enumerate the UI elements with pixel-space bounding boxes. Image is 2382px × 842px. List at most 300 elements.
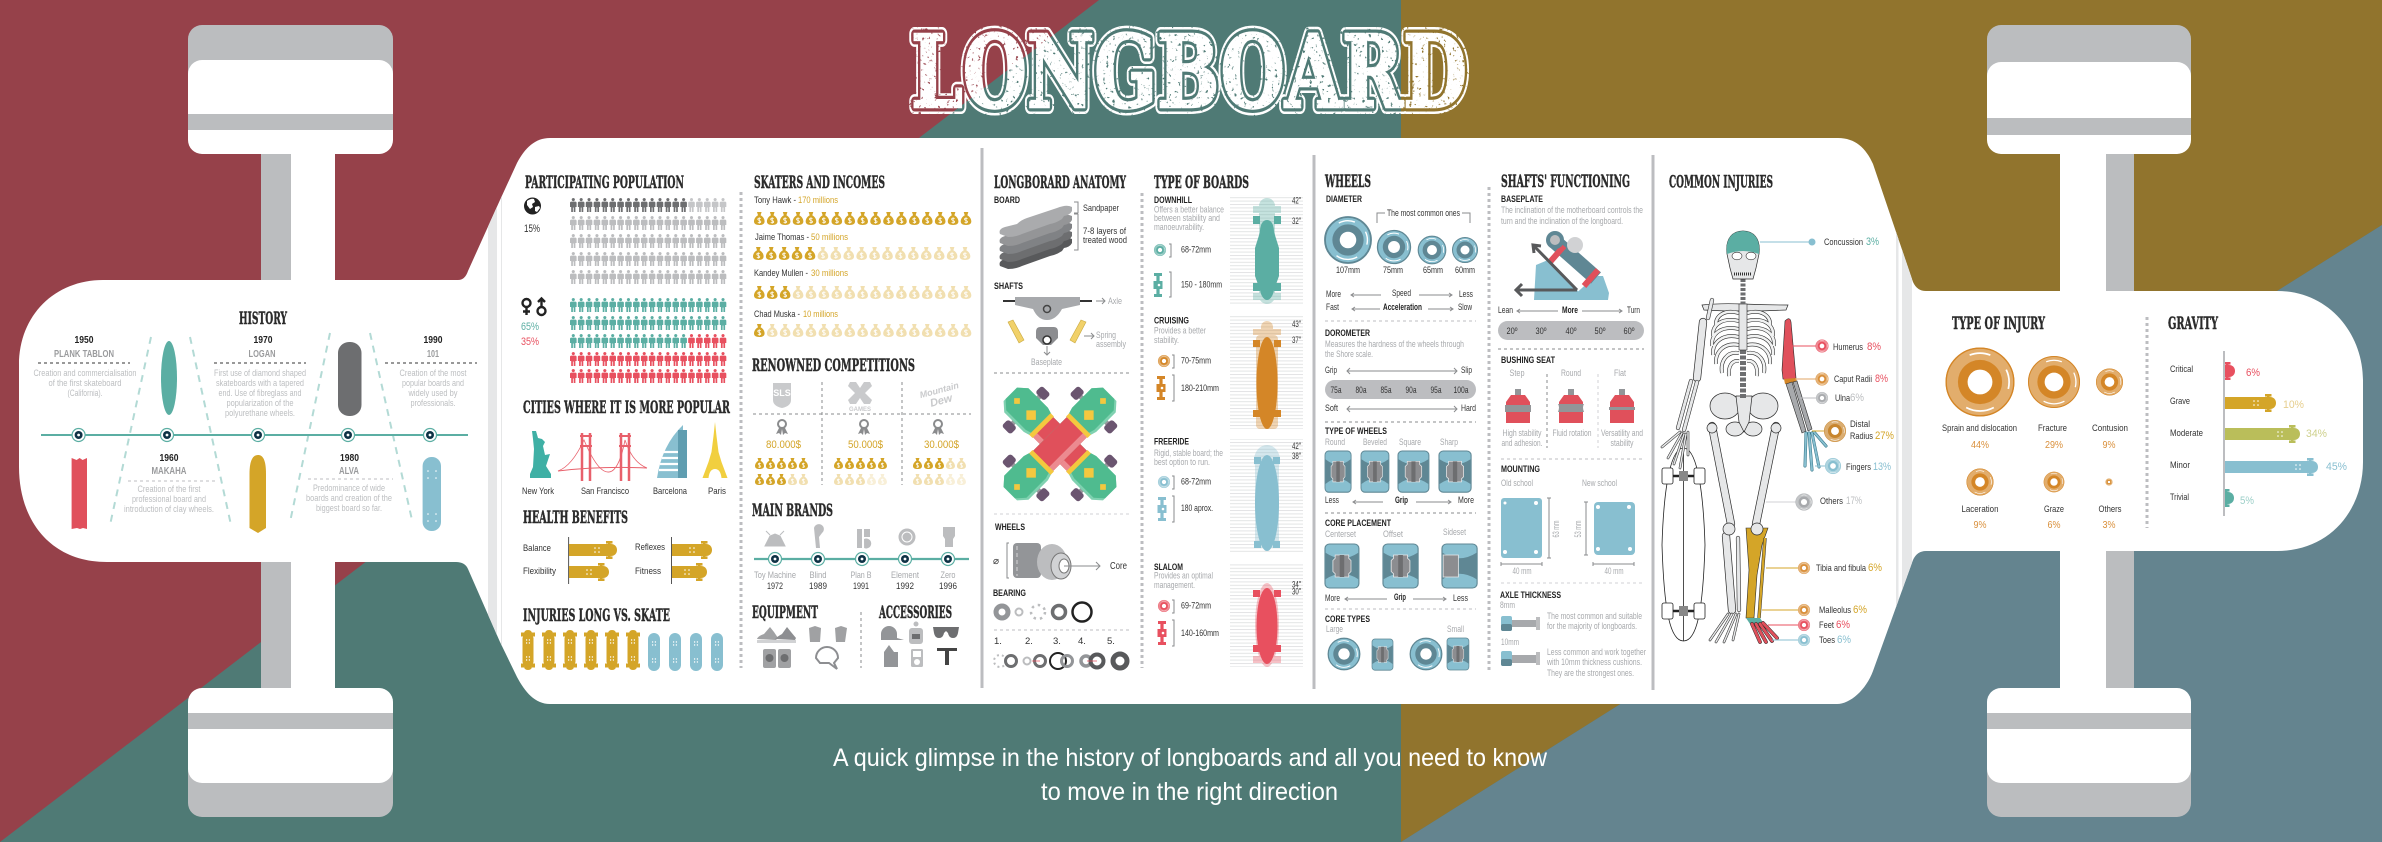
labels: truck parts	[1031, 296, 1126, 368]
injury labels: Sprain and dislocation	[1942, 423, 2017, 434]
stat: male female share: 65%	[521, 321, 539, 333]
injury labels	[1942, 423, 2128, 531]
mounting block: 53 mm	[1573, 520, 1584, 538]
row: kandey mullen	[754, 268, 971, 299]
entry: 1990 101: Creation of the most	[400, 368, 467, 379]
board type: slalom: 30"	[1292, 587, 1301, 598]
illustration: crossed boards	[990, 374, 1130, 514]
scale: speed and acceleration	[1326, 288, 1473, 313]
callout: fingers: 13%	[1873, 461, 1891, 473]
callout: caput radii: 8%	[1875, 373, 1888, 385]
panel: gravity	[2168, 314, 2347, 516]
subheading: bearing: BEARING	[993, 588, 1026, 599]
entry: 1960 makaha	[124, 452, 217, 515]
bearing step numbers: 2.	[1025, 636, 1033, 647]
subheading: core types: Large	[1326, 624, 1343, 635]
board type: freeride: Rigid, stable board; the	[1154, 448, 1223, 459]
callout: fingers: Fingers	[1846, 462, 1871, 473]
illustration: baseplate angle	[1516, 231, 1609, 300]
board type: freeride: best option to run.	[1154, 457, 1210, 468]
heading: renowned competitions: RENOWNED COMPETITIONS	[752, 356, 915, 376]
bearing step numbers	[994, 636, 1115, 647]
heading: skaters and incomes: SKATERS AND INCOMES	[754, 173, 885, 193]
entry: 1950 plank tablon: Creation and commercialisation	[34, 368, 136, 379]
row: tony hawk: Tony Hawk -	[754, 195, 796, 206]
scale: grip by core placement: More	[1325, 593, 1340, 604]
subheading: durometer: DOROMETER	[1325, 328, 1370, 339]
heading: accessories: ACCESSORIES	[878, 603, 952, 623]
panel: history timeline	[34, 309, 477, 533]
heading: shafts functioning: SHAFTS' FUNCTIONING	[1501, 172, 1630, 192]
heading: type of boards: TYPE OF BOARDS	[1154, 173, 1249, 193]
injury labels: Contusion	[2092, 423, 2128, 434]
callout: humerus: 8%	[1867, 341, 1881, 353]
board type: freeride: 42"	[1292, 441, 1301, 452]
labels	[523, 542, 665, 577]
mounting block: 63 mm	[1551, 520, 1562, 538]
callout: others	[1766, 494, 1862, 510]
icons: bushings	[1505, 389, 1635, 423]
stat: male female share	[521, 321, 539, 348]
labels: board layers: Sandpaper	[1083, 203, 1119, 214]
scale: hardness: Hard	[1461, 403, 1476, 414]
entry: 1960 makaha: MAKAHA	[152, 465, 187, 477]
brand icons	[765, 524, 955, 548]
bearing step numbers: 3.	[1053, 636, 1061, 647]
brand names: Blind	[810, 570, 826, 581]
board: makaha	[161, 341, 177, 415]
subheading: type of wheels	[1325, 426, 1471, 492]
subheading: core placement: Centerset	[1325, 529, 1356, 540]
entry: 1950 plank tablon: (California).	[68, 388, 102, 399]
entry: 1970 logan: LOGAN	[248, 348, 276, 360]
injury labels: Laceration	[1962, 504, 1998, 515]
board type: cruising: CRUISING	[1154, 316, 1189, 326]
callout: malleolus: Malleolus	[1819, 605, 1851, 616]
pictogram: population share	[570, 198, 726, 284]
labels: truck parts: assembly	[1096, 339, 1126, 350]
axle thickness block: The most common and suitable	[1547, 611, 1642, 622]
entry: 1980 alva	[306, 452, 393, 514]
board type: cruising: 43"	[1292, 319, 1301, 330]
row: tony hawk: 170 millions	[798, 195, 838, 206]
scale: hardness: 100a	[1454, 385, 1469, 396]
board: 101	[423, 457, 441, 531]
entry: 1990 101: professionals.	[410, 398, 456, 409]
callout: toes	[1772, 634, 1851, 646]
entry: 1980 alva: Predominance of wide	[313, 483, 385, 494]
board type: downhill: 42"	[1292, 196, 1301, 206]
bearing step numbers: 4.	[1078, 636, 1086, 647]
subheading: type of wheels: Round	[1325, 437, 1345, 448]
scale: grip by wheel type: More	[1458, 495, 1474, 506]
mounting block: New school	[1582, 478, 1617, 489]
board type: downhill	[1154, 195, 1303, 304]
row: jaime thomas	[753, 232, 970, 260]
callout: ulna: Ulna	[1835, 393, 1851, 404]
bearing step numbers: 5.	[1107, 636, 1115, 647]
row: minor	[2170, 458, 2347, 476]
city labels	[522, 486, 726, 497]
heading: equipment: EQUIPMENT	[752, 603, 818, 623]
tagline: A quick glimpse in the history of longboards and all you need to know	[833, 744, 1548, 772]
callout: malleolus	[1762, 604, 1867, 616]
callout: concussion: Concussion	[1824, 237, 1863, 248]
row: jaime thomas: Jaime Thomas -	[755, 232, 809, 243]
baseplate block: 40º	[1566, 326, 1577, 337]
scale: speed and acceleration: Acceleration	[1383, 302, 1422, 313]
heading: type of injury: TYPE OF INJURY	[1952, 314, 2045, 334]
panel: equipment	[752, 603, 847, 669]
bushing seat block: Round	[1561, 368, 1581, 379]
bushing seat block: Step	[1510, 368, 1524, 379]
diagram: wheel diameters: 107mm	[1336, 265, 1360, 276]
entry: 1950 plank tablon: PLANK TABLON	[54, 348, 114, 360]
accessory icons	[881, 622, 959, 667]
baseplate block: Turn	[1627, 305, 1640, 316]
bushing seat block	[1501, 355, 1643, 449]
board type: cruising: Provides a better	[1154, 326, 1206, 337]
bushing seat block: stability	[1610, 438, 1634, 449]
logo: X Games	[848, 382, 872, 413]
callout: distal radius: Radius	[1850, 431, 1873, 442]
board type: downhill: DOWNHILL	[1154, 195, 1192, 206]
board type: freeride: 180 aprox.	[1181, 503, 1213, 514]
callout: tibia and fibula: Tibia and fibula	[1816, 563, 1867, 574]
scale: grip by wheel type	[1325, 495, 1474, 506]
prize amounts: 30.000$	[924, 439, 959, 451]
heading: cities: CITIES WHERE IT IS MORE POPULAR	[523, 398, 730, 418]
panel: shafts functioning	[1498, 172, 1646, 679]
baseplate block	[1498, 194, 1644, 340]
scale: grip by core placement: Less	[1453, 593, 1468, 604]
entry: 1950 plank tablon: 1950	[74, 334, 94, 346]
subheading: shafts: SHAFTS	[994, 281, 1023, 292]
wheels: injury proportions	[1946, 348, 2123, 496]
baseplate block: 50º	[1594, 326, 1606, 337]
brand names	[754, 570, 956, 581]
row: minor: Minor	[2170, 460, 2190, 471]
scale: speed and acceleration: Less	[1459, 289, 1473, 300]
axle thickness block: 8mm	[1500, 600, 1515, 611]
subheading: diameter: DIAMETER	[1326, 194, 1362, 205]
subheading: core placement: Offset	[1383, 529, 1403, 540]
injury labels: Fracture	[2038, 423, 2067, 434]
callout: ulna	[1800, 392, 1864, 404]
callout: tibia and fibula: 6%	[1868, 562, 1882, 574]
bushing seat block: BUSHING SEAT	[1501, 355, 1555, 366]
callout: malleolus: 6%	[1853, 604, 1867, 616]
entry: 1950 plank tablon	[34, 334, 136, 399]
row: kandey mullen: 30 millions	[811, 268, 848, 279]
entry: 1960 makaha: 1960	[160, 452, 179, 464]
labels: Flexibility	[523, 566, 556, 577]
illustration: wheel detail	[993, 543, 1127, 580]
equipment icons	[757, 626, 847, 669]
panel: type of injury	[1942, 314, 2128, 531]
right trucks and wheels	[1987, 25, 2191, 817]
brand years: 1992	[896, 581, 914, 592]
axle thickness block: with 10mm thickness cushions.	[1546, 657, 1642, 668]
scale: hardness: Soft	[1325, 403, 1338, 414]
callout: tibia and fibula	[1766, 562, 1882, 574]
title: LONGBOARD	[911, 13, 1467, 131]
prize amounts: 80.000$	[766, 439, 801, 451]
board type: slalom	[1154, 562, 1303, 667]
callout: ulna: 6%	[1850, 392, 1864, 404]
left trucks and wheels	[188, 25, 393, 817]
scale: hardness	[1325, 365, 1476, 414]
brand names: Zero	[940, 570, 956, 581]
board type: downhill: 68-72mm	[1181, 244, 1211, 256]
subheading: core placement: CORE PLACEMENT	[1325, 518, 1391, 529]
callout: concussion	[1760, 236, 1879, 248]
injury labels: 44%	[1971, 439, 1989, 451]
callout: feet	[1768, 619, 1850, 631]
scale: grip by wheel type: Less	[1325, 495, 1339, 506]
bushing seat block: High stability	[1502, 428, 1542, 439]
bushing seat block: and adhesion.	[1502, 438, 1542, 449]
subheading: type of wheels: Square	[1399, 437, 1421, 448]
illustration: truck parts	[1003, 297, 1105, 355]
injury labels: 6%	[2048, 519, 2060, 531]
heading: injuries long vs skate: INJURIES LONG VS. SKATE	[523, 606, 670, 626]
panel: common injuries	[1662, 172, 1894, 646]
subheading: board: BOARD	[994, 195, 1020, 206]
heading: main brands: MAIN BRANDS	[752, 501, 833, 521]
scale: grip by core placement: Grip	[1394, 592, 1406, 603]
tagline: to move in the right direction	[1041, 778, 1338, 806]
entry: 1960 makaha: professional board and	[132, 494, 206, 505]
city labels: New York	[522, 486, 554, 497]
entry: 1950 plank tablon: of the first skateboard	[48, 378, 122, 389]
icon: golden gate bridge	[558, 433, 647, 481]
heading: history: HISTORY	[239, 309, 287, 329]
scale: hardness: 80a	[1356, 385, 1367, 396]
board type: freeride: FREERIDE	[1154, 437, 1189, 448]
illustration: wheel detail: ⌀	[993, 556, 999, 567]
brand names: Toy Machine	[754, 570, 796, 581]
subheading: core types	[1325, 614, 1469, 670]
row: chad muska	[754, 309, 971, 337]
baseplate block: 20º	[1506, 326, 1518, 337]
icon: gender symbols	[522, 298, 546, 315]
panel: longboard anatomy	[990, 173, 1130, 669]
board type: cruising: 70-75mm	[1181, 356, 1211, 367]
row: moderate: 34%	[2306, 428, 2327, 440]
panel: wheels	[1324, 172, 1478, 670]
baseplate block: BASEPLATE	[1501, 194, 1543, 205]
logo: Mountain Dew: Mountain	[919, 380, 960, 400]
board type: slalom: SLALOM	[1154, 562, 1183, 573]
board type: downhill: 32"	[1292, 216, 1301, 227]
labels: truck parts: Spring	[1096, 330, 1116, 341]
scale: hardness: 85a	[1380, 385, 1392, 396]
row: grave: 10%	[2283, 399, 2304, 411]
baseplate block: 30º	[1536, 326, 1547, 337]
heading: common injuries: COMMON INJURIES	[1669, 172, 1773, 192]
icon: statue of liberty	[530, 431, 551, 478]
panel: type of boards	[1154, 173, 1303, 667]
heading: longboard anatomy: LONGBORARD ANATOMY	[994, 173, 1126, 193]
diagram: wheel diameters: 65mm	[1423, 265, 1443, 276]
plate: new school	[1594, 502, 1635, 555]
illustration: bearing parts	[996, 602, 1092, 622]
scale: speed and acceleration: Fast	[1326, 302, 1339, 313]
title	[909, 26, 1470, 116]
subheading: durometer: the Shore scale.	[1325, 349, 1373, 360]
logo: Mountain Dew	[919, 380, 960, 410]
axle thickness block: Less common and work together	[1547, 647, 1646, 658]
pictogram: boards	[521, 630, 723, 671]
subheading: core placement	[1325, 518, 1477, 588]
axle thickness block: They are the strongest ones.	[1547, 668, 1634, 679]
scale: speed and acceleration: More	[1326, 289, 1341, 300]
callout: concussion: 3%	[1866, 236, 1879, 248]
entry: 1960 makaha: introduction of clay wheels.	[124, 504, 214, 515]
labels: truck parts: Axle	[1108, 296, 1122, 307]
axle thickness block: 10mm	[1501, 637, 1519, 648]
stat: world share: 15%	[524, 223, 540, 235]
subheading: type of wheels: Beveled	[1363, 437, 1387, 448]
board type: freeride	[1154, 437, 1303, 552]
board type: cruising: 180-210mm	[1181, 383, 1219, 394]
entry: 1990 101: 101	[427, 348, 439, 360]
city labels: San Francisco	[581, 486, 629, 497]
labels: board layers: 7-8 layers of	[1083, 226, 1126, 237]
heading: wheels: WHEELS	[1324, 172, 1371, 192]
mounting block: Old school	[1501, 478, 1533, 489]
bushing seat block: Fluid rotation	[1552, 428, 1592, 439]
mounting block	[1501, 464, 1635, 577]
scale: speed and acceleration: Speed	[1392, 288, 1411, 299]
illustration: wheel detail: Core	[1110, 561, 1127, 572]
scale: hardness: 75a	[1330, 385, 1342, 396]
subheading: core types: CORE TYPES	[1325, 614, 1370, 625]
entry: 1990 101: 1990	[424, 334, 443, 346]
bushing seat block: Versatility and	[1601, 428, 1643, 439]
callout: distal radius	[1812, 419, 1894, 442]
bars: benefits	[569, 541, 712, 581]
labels: board layers: treated wood	[1083, 235, 1127, 246]
board type: freeride: 68-72mm	[1181, 477, 1211, 488]
city labels: Paris	[708, 486, 726, 497]
row: moderate: Moderate	[2170, 428, 2203, 439]
axle thickness block: for the majority of longboards.	[1547, 621, 1637, 632]
board type: downhill: between stability and	[1154, 213, 1220, 224]
illustration: board layers	[1000, 206, 1072, 269]
brand timeline markers	[768, 552, 954, 566]
entry: 1960 makaha: Creation of the first	[138, 484, 201, 495]
entry: 1980 alva: boards and creation of the	[306, 493, 392, 504]
subheading: core placement: Sideset	[1443, 527, 1466, 538]
subheading: type of wheels: Sharp	[1440, 437, 1458, 448]
stat: male female share: 35%	[521, 336, 539, 348]
callout: others: 17%	[1846, 495, 1862, 507]
heading: gravity: GRAVITY	[2168, 314, 2218, 334]
icon: burj al arab	[657, 425, 687, 478]
panel: cities	[522, 398, 730, 497]
baseplate block: Lean	[1498, 305, 1513, 316]
row: trivial: 5%	[2240, 495, 2254, 507]
entry: 1990 101	[385, 334, 477, 409]
injury labels: Others	[2098, 504, 2122, 515]
injury labels: Graze	[2044, 504, 2064, 515]
diagram: wheel diameters	[1325, 208, 1478, 276]
city labels: Barcelona	[653, 486, 688, 497]
row: tony hawk	[754, 195, 971, 225]
pictogram: gender share	[570, 298, 726, 383]
labels: Balance	[523, 543, 551, 554]
callout: distal radius: 27%	[1875, 430, 1894, 442]
injury labels: 29%	[2045, 439, 2063, 451]
board type: slalom: Provides an optimal	[1154, 571, 1213, 582]
row: grave	[2170, 394, 2304, 412]
entry: 1970 logan: First use of diamond shaped	[214, 368, 306, 379]
diagram: wheel diameters: 75mm	[1383, 265, 1403, 276]
callout: feet: Feet	[1819, 620, 1834, 631]
board type: cruising	[1154, 316, 1303, 429]
mounting block: 40 mm	[1604, 566, 1624, 577]
labels: board layers	[1083, 203, 1127, 246]
panel: renowned competitions	[752, 356, 971, 485]
mounting block: MOUNTING	[1501, 464, 1540, 475]
logo: SLS	[773, 383, 791, 408]
scale: hardness: 95a	[1430, 385, 1442, 396]
callout: caput radii: Caput Radii	[1834, 374, 1872, 385]
scale: hardness: Grip	[1325, 365, 1337, 376]
brand years: 1972	[767, 581, 783, 592]
axle thickness block	[1500, 590, 1646, 679]
injury labels: 9%	[2102, 439, 2116, 451]
row: trivial: Trivial	[2170, 492, 2189, 503]
callout: caput radii	[1795, 372, 1888, 386]
subheading: durometer: Measures the hardness of the wheels through	[1325, 339, 1464, 350]
tagline	[833, 744, 1548, 806]
scale: grip by wheel type: Grip	[1395, 495, 1408, 506]
row: chad muska: 10 millions	[803, 309, 838, 320]
brand years: 1996	[939, 581, 957, 592]
board type: downhill: 150 - 180mm	[1181, 280, 1222, 290]
row: kandey mullen: Kandey Mullen -	[754, 268, 808, 279]
callout: fingers	[1815, 458, 1891, 474]
plate: old school	[1501, 498, 1542, 558]
prize amounts	[766, 439, 959, 451]
callout: feet: 6%	[1836, 619, 1850, 631]
icon: globe	[524, 198, 541, 214]
row: critical: 6%	[2246, 367, 2260, 379]
bushing seat block: Flat	[1614, 368, 1626, 379]
board type: cruising: 37"	[1292, 335, 1301, 346]
row: moderate	[2170, 425, 2327, 443]
bearing step numbers: 1.	[994, 636, 1002, 647]
board: plank	[72, 458, 87, 529]
board type: cruising: stability.	[1154, 335, 1179, 346]
callout: toes: 6%	[1837, 634, 1851, 646]
row: minor: 45%	[2326, 461, 2347, 473]
callout: others: Others	[1820, 496, 1843, 507]
logo: X Games: GAMES	[849, 407, 871, 413]
brand years: 1989	[809, 581, 827, 592]
panel: skaters and incomes	[753, 173, 971, 337]
panel: main brands	[752, 501, 969, 592]
labels: truck parts: Baseplate	[1031, 357, 1062, 368]
board: alva	[338, 342, 362, 416]
board type: slalom: 34"	[1292, 580, 1301, 590]
row: grave: Grave	[2170, 396, 2190, 407]
panel: participating population	[521, 173, 726, 383]
injury labels: 3%	[2102, 519, 2116, 531]
